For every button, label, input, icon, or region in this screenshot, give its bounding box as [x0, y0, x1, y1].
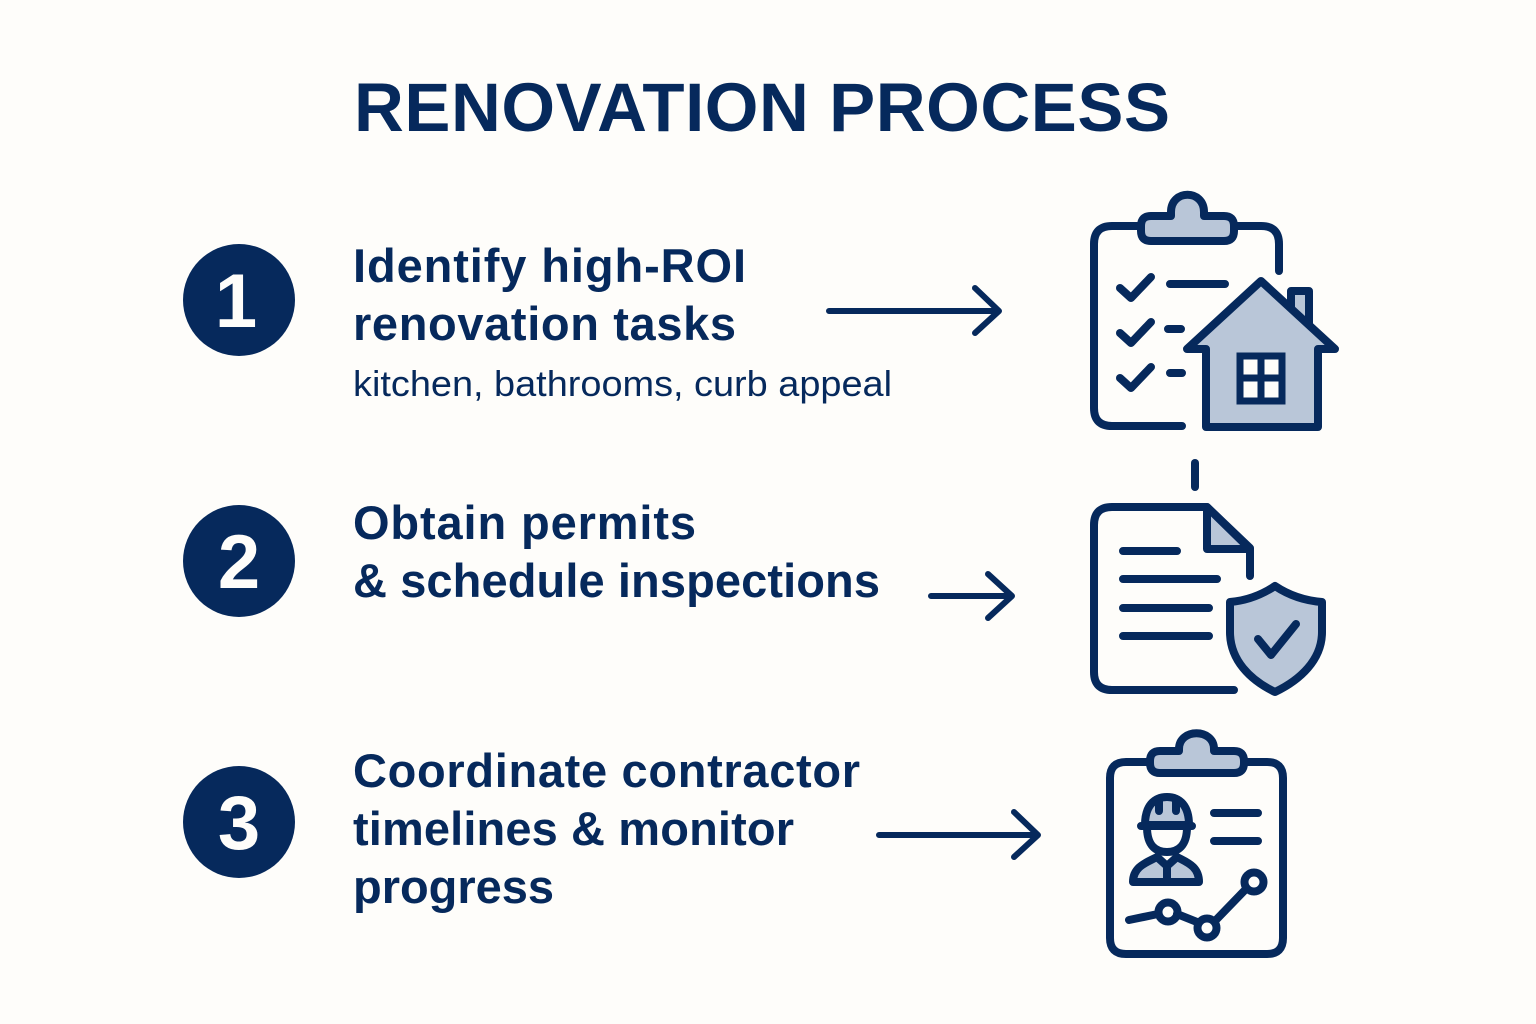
step 2 number badge: 2	[218, 520, 260, 605]
title: RENOVATION PROCESS	[354, 69, 1170, 146]
step 1 subtext: kitchen, bathrooms, curb appeal	[353, 363, 892, 404]
step 3 heading: timelines & monitor	[353, 802, 794, 855]
step 2 number badge	[183, 505, 295, 617]
arrow 2	[931, 574, 1012, 618]
step 3 heading: Coordinate contractor	[353, 744, 860, 797]
icon: clipboard checklist and house	[1094, 195, 1335, 427]
step 1 heading	[353, 239, 746, 350]
step 3 number badge: 3	[218, 781, 260, 866]
arrow 3	[879, 812, 1038, 857]
step 2 heading	[353, 496, 880, 607]
step 3 number badge	[183, 766, 295, 878]
step 2 heading: & schedule inspections	[353, 554, 880, 607]
step 1 heading: renovation tasks	[353, 297, 736, 350]
icon: document with shield	[1094, 463, 1322, 692]
icon: clipboard with contractor and progress chart	[1110, 733, 1283, 954]
step 1 heading: Identify high-ROI	[353, 239, 746, 292]
step 3 heading: progress	[353, 860, 554, 913]
step 1 number badge	[183, 244, 295, 356]
step 2 heading: Obtain permits	[353, 496, 696, 549]
step 1 number badge: 1	[215, 259, 257, 344]
arrow 1	[829, 288, 999, 333]
step 3 heading	[353, 744, 860, 913]
